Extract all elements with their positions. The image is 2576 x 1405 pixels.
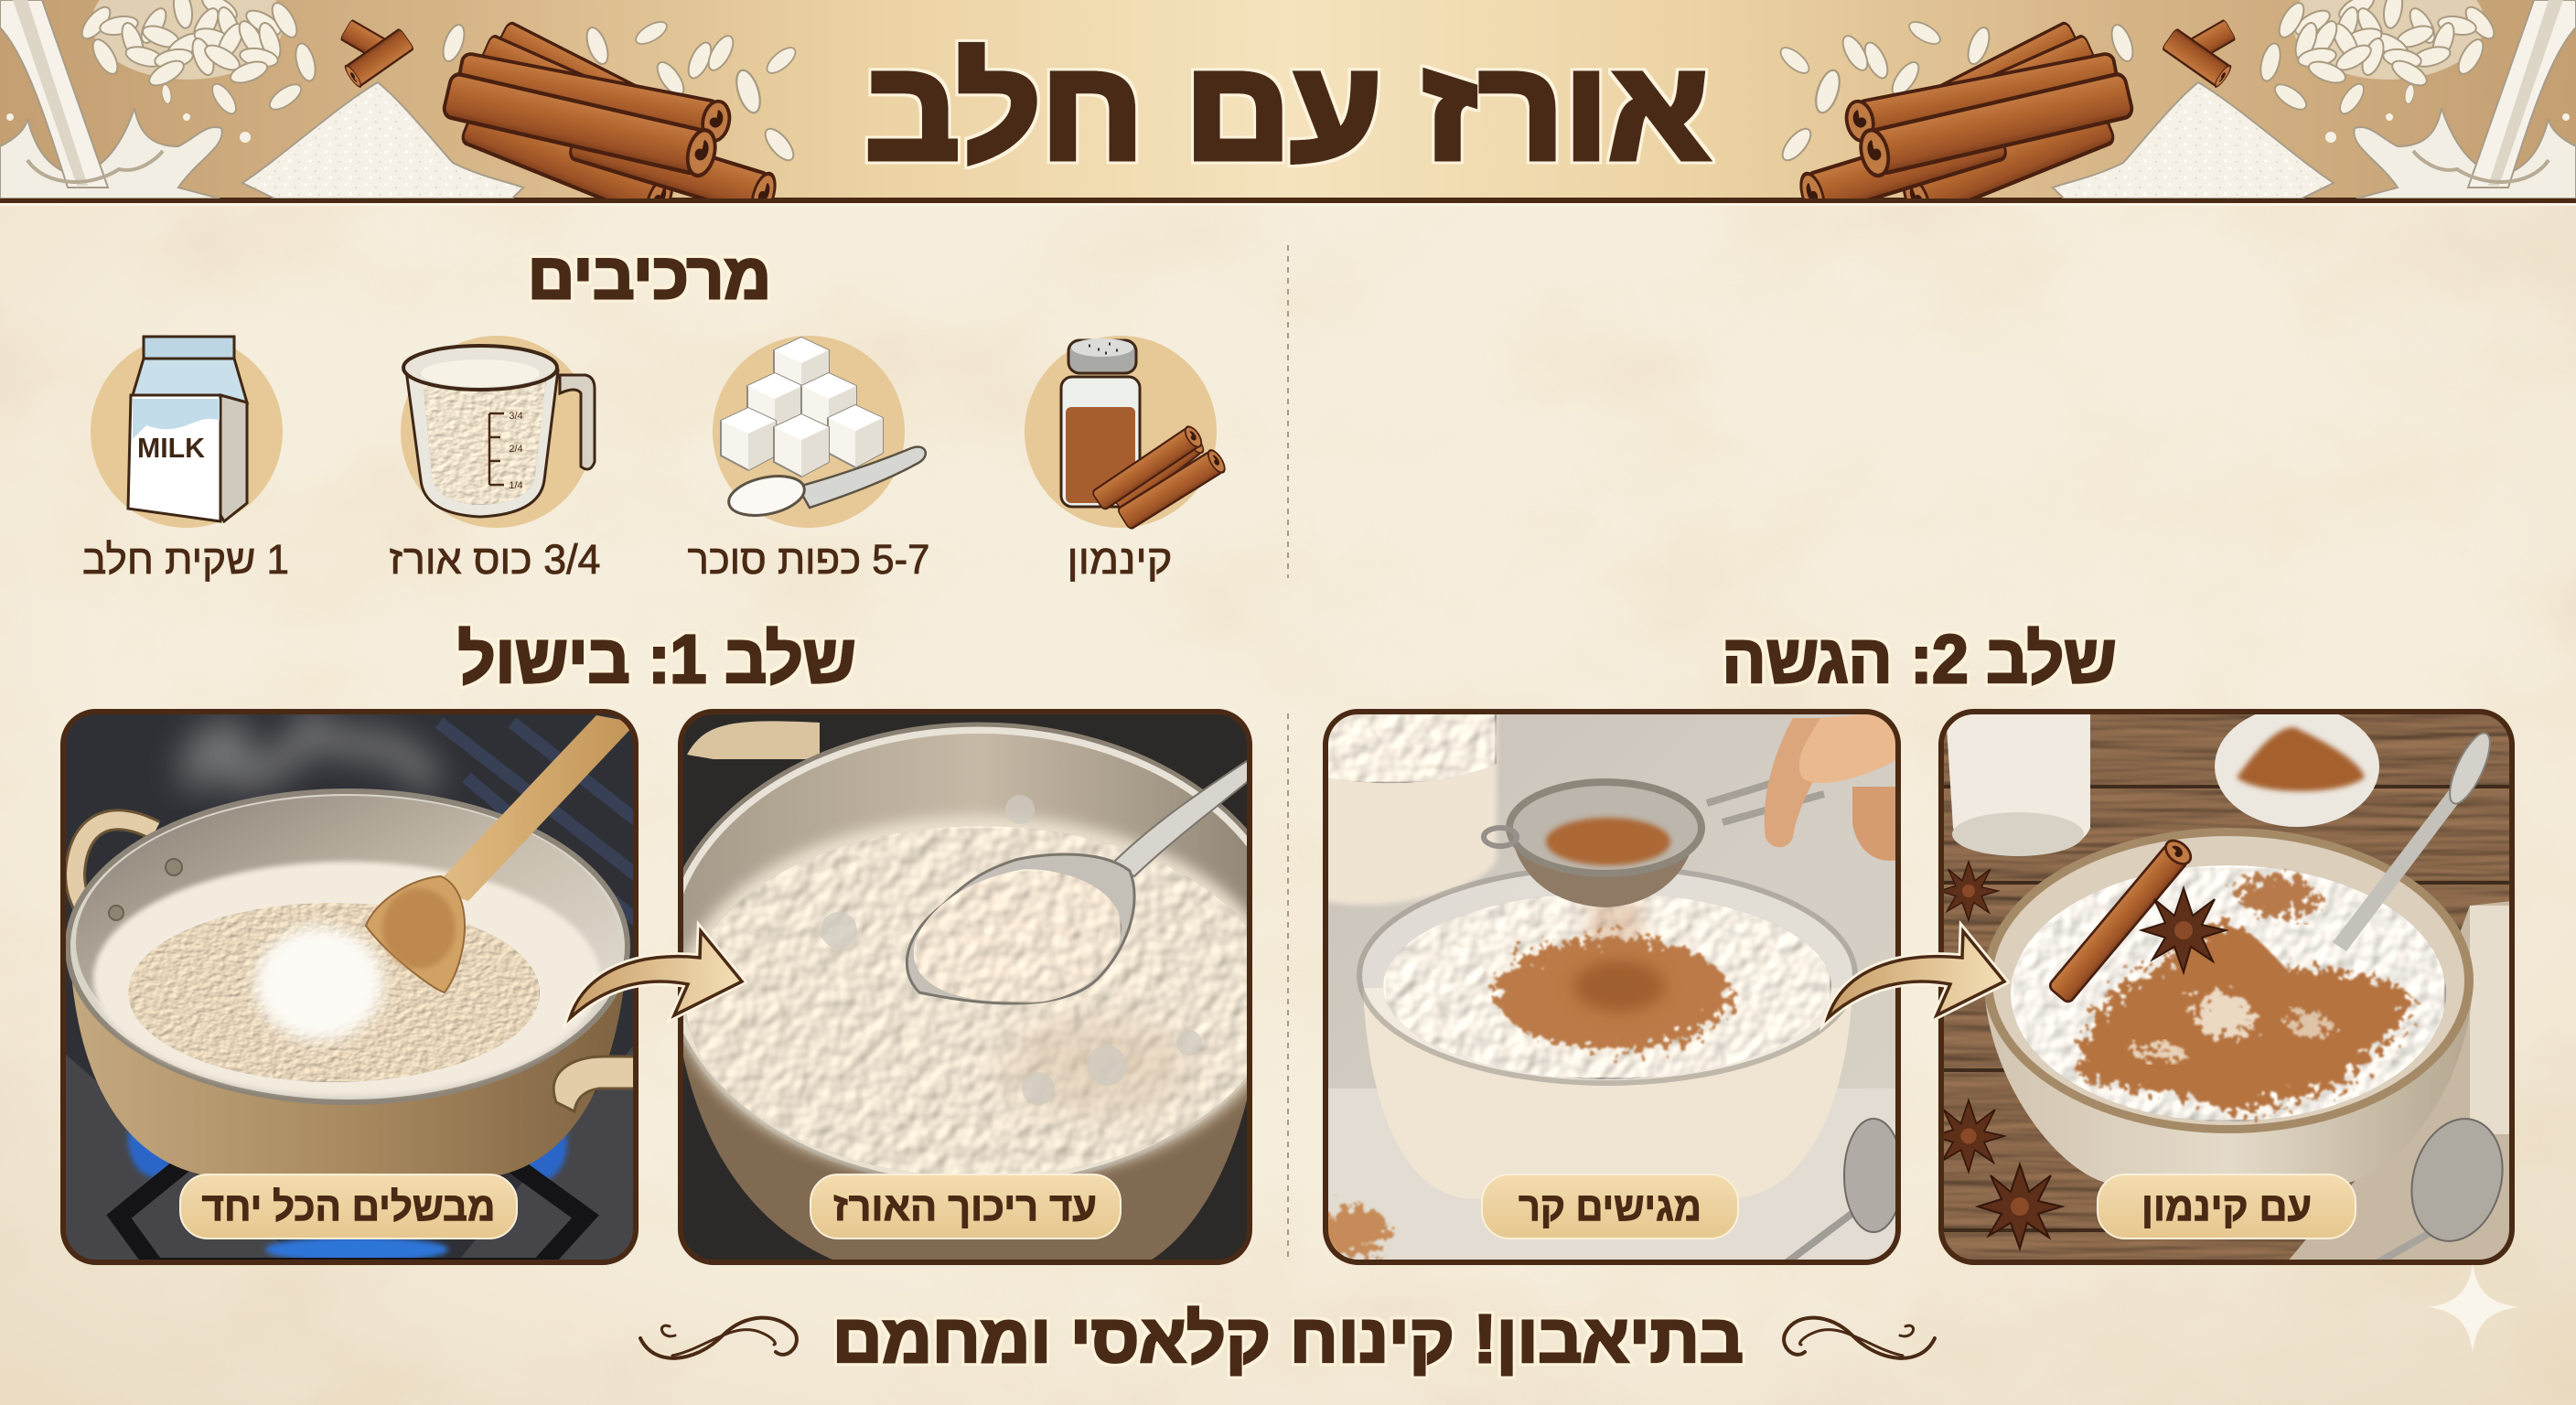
heading: step 1: שלב 1: בישול <box>458 621 856 697</box>
small cinnamon stick <box>340 19 414 89</box>
sparkle mark <box>2429 1264 2518 1352</box>
frame <box>63 712 636 1262</box>
ingredient: rice cup: 1/4 <box>509 480 523 491</box>
ingredient: cinnamon <box>1025 336 1228 531</box>
title: אורז עם חלב <box>865 33 1709 188</box>
photo: simmering rice and spoon <box>662 712 1295 1281</box>
footer text: בתיאבון! קינוח קלאסי ומחמם <box>832 1301 1744 1377</box>
ingredient: milk <box>91 336 283 528</box>
photo: finished bowl on wood table <box>1933 706 2516 1262</box>
ingredient labels: קינמון <box>1067 536 1173 583</box>
panel: cook everything together <box>63 712 640 1267</box>
header illustration: left ingredients <box>0 0 800 223</box>
ingredient: rice cup <box>401 336 595 528</box>
large cinnamon sticks <box>442 21 779 223</box>
caption pill: מגישים קר <box>1519 1185 1701 1229</box>
caption pill <box>2098 1174 2356 1239</box>
panel: ingredients <box>82 241 1228 583</box>
loose rice grains <box>88 17 800 165</box>
ingredient labels: 3/4 כוס אורז <box>390 536 600 583</box>
panel: until rice softens <box>678 709 1252 1265</box>
panel: served cold <box>1319 712 1903 1264</box>
ingredient: rice cup: 2/4 <box>509 444 523 455</box>
sugar pile <box>242 82 523 198</box>
arrow: step 2 to next photo <box>1828 931 2004 1018</box>
header banner <box>0 0 2576 223</box>
ingredients heading: מרכיבים <box>528 241 771 312</box>
caption pill: מבשלים הכל יחד <box>201 1185 496 1229</box>
ingredient: rice cup: 3/4 <box>509 411 523 422</box>
decorative swirl left <box>640 1318 797 1358</box>
heading: step 2: שלב 2: הגשה <box>1722 621 2117 697</box>
caption pill: עד ריכוך האורז <box>833 1185 1097 1229</box>
ingredient: sugar <box>713 336 926 528</box>
ingredient labels <box>82 536 1173 583</box>
arrow: step 1 to next photo <box>570 931 742 1018</box>
milk pour and splash <box>0 0 251 198</box>
milk label: MILK <box>137 432 206 464</box>
frame <box>681 712 1250 1262</box>
panel: with cinnamon <box>1933 706 2516 1262</box>
photo: pot on stove <box>63 712 640 1267</box>
frame <box>1326 712 1898 1262</box>
caption pill: עם קינמון <box>2141 1185 2312 1229</box>
ingredient labels: 1 שקית חלב <box>82 536 289 583</box>
decorative swirl right <box>1784 1318 1935 1358</box>
vertical divider bottom <box>1287 713 1289 1262</box>
caption pill <box>810 1174 1121 1239</box>
rice pile <box>77 0 302 91</box>
caption pill <box>1482 1174 1738 1239</box>
header illustration: right ingredients (mirrored) <box>1776 0 2576 223</box>
frame <box>1941 712 2512 1262</box>
caption pill <box>180 1174 517 1239</box>
photo: bowl with sieve <box>1319 712 1903 1264</box>
vertical divider top <box>1287 245 1289 578</box>
ingredient labels: 5-7 כפות סוכר <box>688 536 929 583</box>
